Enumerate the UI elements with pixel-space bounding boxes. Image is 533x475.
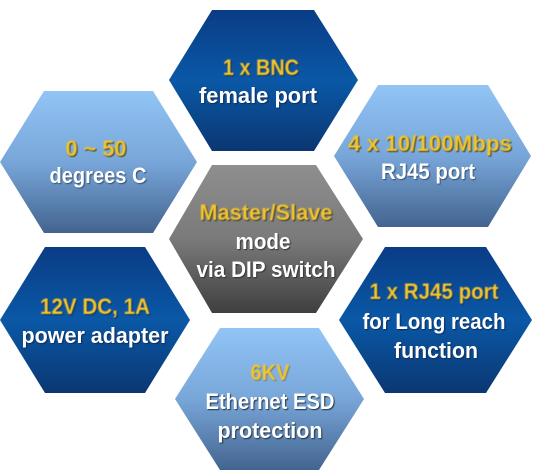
label: 4 x 10/100Mbps RJ45 port: 4 x 10/100Mbps — [348, 131, 512, 156]
label: 0 ~ 50 degrees C: degrees C — [50, 163, 147, 188]
label: Master/Slave mode via DIP switch: mode — [236, 230, 292, 255]
panel: BNC port hexagon — [169, 10, 358, 151]
label: 0 ~ 50 degrees C: 0 ~ 50 — [66, 137, 128, 162]
panel: ESD protection hexagon — [175, 328, 364, 470]
label: 1 x BNC female port: female port — [200, 84, 319, 109]
label: Master/Slave mode via DIP switch: mode — [236, 229, 290, 254]
label: 0 ~ 50 degrees C — [50, 136, 148, 189]
label: 12V DC, 1A power adapter: power adapter — [22, 323, 169, 348]
label: 0 ~ 50 degrees C: 0 ~ 50 — [66, 136, 126, 161]
label: 6KV Ethernet ESD protection — [206, 360, 336, 444]
label: 12V DC, 1A power adapter — [22, 294, 170, 349]
label: Master/Slave mode via DIP switch: via DIP switch — [196, 257, 336, 282]
panel: long reach port hexagon — [339, 247, 532, 393]
label: 4 x 10/100Mbps RJ45 port: 4 x 10/100Mbps — [349, 132, 513, 157]
label: 6KV Ethernet ESD protection: Ethernet ESD — [206, 390, 336, 415]
label: 1 x RJ45 port for Long reach function: 1 x RJ45 port — [370, 280, 500, 305]
label: 12V DC, 1A power adapter: 12V DC, 1A — [40, 294, 150, 319]
label: 1 x BNC female port: female port — [199, 83, 318, 108]
label: 1 x BNC female port: 1 x BNC — [224, 56, 300, 81]
label: Master/Slave mode via DIP switch: via DIP switch — [198, 258, 336, 283]
label: 6KV Ethernet ESD protection: Ethernet ESD — [206, 389, 334, 414]
label: 12V DC, 1A power adapter: power adapter — [22, 324, 170, 349]
label: 1 x RJ45 port for Long reach function: 1 x RJ45 port — [370, 279, 499, 304]
label: 1 x RJ45 port for Long reach function: function — [394, 338, 478, 363]
label: 4 x 10/100Mbps RJ45 port: RJ45 port — [382, 160, 477, 185]
label: 1 x RJ45 port for Long reach function: for Long reach — [364, 310, 506, 335]
label: 12V DC, 1A power adapter: 12V DC, 1A — [41, 295, 151, 320]
label: 4 x 10/100Mbps RJ45 port: RJ45 port — [381, 159, 476, 184]
label: 4 x 10/100Mbps RJ45 port — [348, 131, 513, 185]
label: 0 ~ 50 degrees C: degrees C — [50, 164, 148, 189]
panel: center mode hexagon — [169, 165, 363, 313]
label: Master/Slave mode via DIP switch: Master/Slave — [200, 201, 334, 226]
label: 6KV Ethernet ESD protection: protection — [218, 419, 324, 444]
label: 1 x RJ45 port for Long reach function: for Long reach — [362, 309, 506, 334]
panel: temperature hexagon — [0, 91, 197, 233]
label: Master/Slave mode via DIP switch: Master/Slave — [200, 200, 332, 225]
label: 1 x RJ45 port for Long reach function — [362, 279, 506, 364]
panel: power adapter hexagon — [0, 247, 190, 393]
label: Master/Slave mode via DIP switch — [196, 200, 336, 283]
panel: Ethernet ports hexagon — [334, 85, 531, 227]
label: 1 x BNC female port: 1 x BNC — [223, 55, 299, 80]
label: 1 x RJ45 port for Long reach function: function — [395, 339, 479, 364]
label: 6KV Ethernet ESD protection: 6KV — [252, 361, 291, 386]
label: 1 x BNC female port — [199, 55, 319, 109]
label: 6KV Ethernet ESD protection: protection — [218, 418, 322, 443]
label: 6KV Ethernet ESD protection: 6KV — [250, 360, 290, 385]
